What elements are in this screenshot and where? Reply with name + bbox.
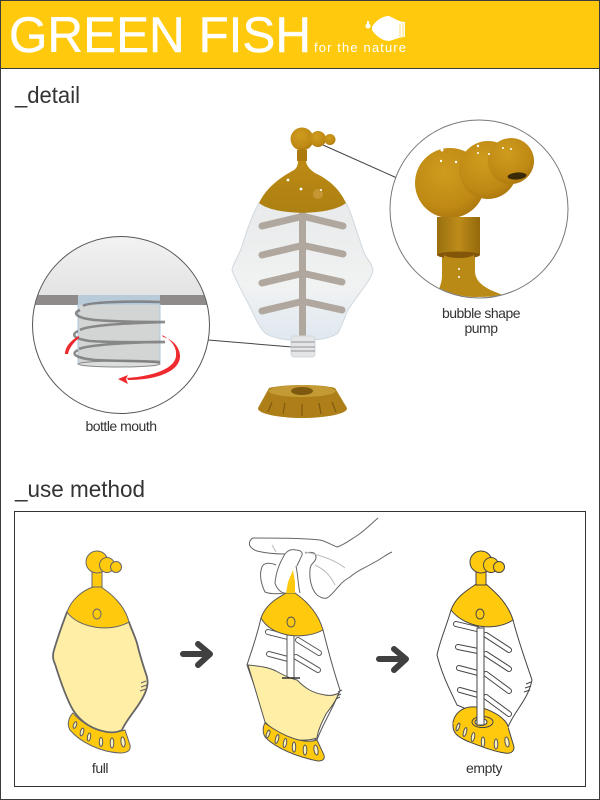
ribs xyxy=(262,217,343,311)
glass body xyxy=(232,203,373,340)
label: full: full xyxy=(92,760,108,776)
arrow xyxy=(379,649,406,670)
connector lines xyxy=(208,145,397,347)
header banner xyxy=(0,1,600,69)
bottle render xyxy=(232,128,373,418)
tagline: for the nature xyxy=(314,40,406,55)
icon: red rotation arrow xyxy=(65,335,180,384)
title: GREEN FISH xyxy=(9,7,311,63)
callout: bottle mouth xyxy=(30,235,212,414)
pump xyxy=(297,150,307,161)
heading: detail: _detail xyxy=(14,82,80,108)
heading: use method: _use method xyxy=(14,476,145,502)
callout: bubble pump xyxy=(390,120,568,298)
step: full xyxy=(53,551,148,753)
hand xyxy=(249,518,392,598)
panel: use method xyxy=(14,512,586,786)
step: empty xyxy=(437,551,532,753)
step: squeeze xyxy=(247,518,392,761)
bottle mouth xyxy=(291,336,315,357)
label: bubble shape pump: bubble shape xyxy=(442,305,521,321)
label: bubble shape pump: pump xyxy=(464,320,498,336)
icon: fish logo xyxy=(366,16,405,41)
label: bottle mouth: bottle mouth xyxy=(85,418,157,434)
label: empty: empty xyxy=(466,760,502,776)
cap xyxy=(258,385,347,418)
arrow xyxy=(183,644,210,665)
dome xyxy=(259,160,346,213)
